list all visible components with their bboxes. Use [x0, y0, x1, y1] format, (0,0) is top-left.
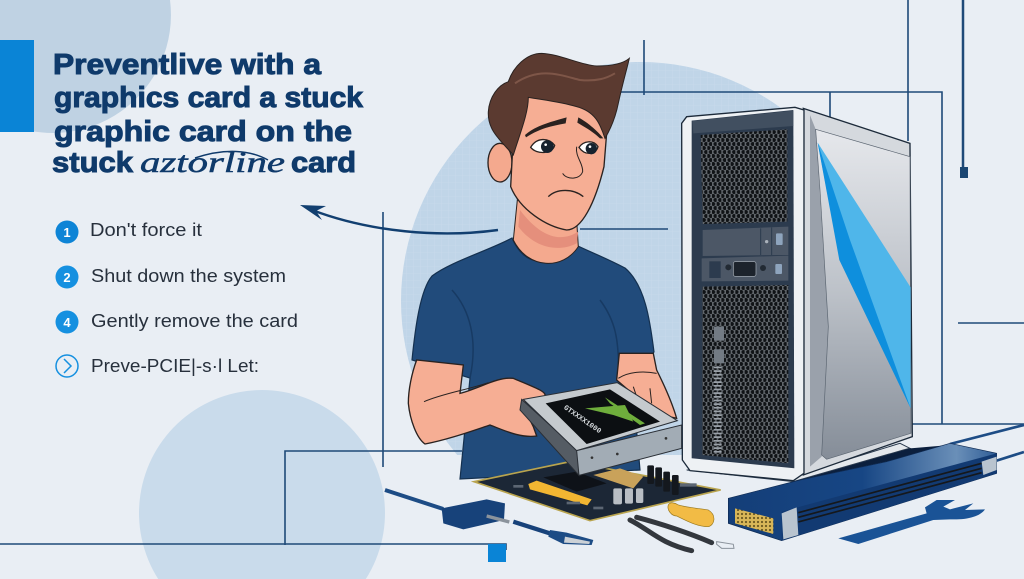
end caps — [782, 507, 798, 539]
tower side — [803, 108, 912, 475]
tower base — [687, 443, 910, 482]
step 1: 1 — [63, 225, 71, 240]
tower shadow — [800, 445, 950, 480]
dark blue stripe — [818, 143, 911, 408]
step 4 — [56, 310, 298, 334]
side panel — [816, 129, 911, 459]
card black face — [546, 389, 660, 444]
adapter box — [442, 499, 505, 529]
power cable — [385, 490, 443, 509]
yellow slot — [528, 481, 592, 505]
board components — [513, 483, 697, 509]
black capacitors — [647, 465, 679, 495]
io panel — [702, 256, 788, 281]
card fins — [520, 399, 579, 475]
drive bay — [703, 227, 788, 256]
ear — [488, 143, 512, 182]
eyebrows — [525, 117, 567, 137]
steps list — [56, 220, 298, 377]
rear ports — [714, 327, 724, 363]
card logo — [585, 397, 645, 425]
accent square: bottom — [488, 544, 506, 562]
title: aztorline — [140, 146, 285, 179]
heatsink — [593, 468, 643, 488]
title — [52, 49, 364, 179]
capacitors — [613, 488, 643, 504]
tools and cables — [385, 490, 734, 551]
step: chevron item: Preve-PCIE|-s·l Let: — [91, 356, 259, 376]
bar body — [728, 443, 997, 541]
face — [511, 93, 613, 230]
hair — [488, 53, 629, 155]
pc tower — [682, 107, 912, 482]
light blue stripe — [818, 143, 911, 408]
step 4: Gently remove the card — [91, 311, 298, 331]
step 2: 2 — [63, 270, 71, 285]
title: card — [291, 147, 356, 179]
gold connector — [735, 508, 773, 534]
screwdriver — [668, 503, 714, 527]
bar cables — [950, 425, 1024, 461]
upper mesh — [701, 129, 787, 224]
title: stuck — [52, 147, 134, 179]
mouth — [548, 190, 583, 197]
t-shirt — [412, 238, 654, 479]
lower mesh — [702, 285, 788, 463]
title: graphic card on the — [54, 116, 352, 148]
accent square: top right line end — [960, 167, 968, 178]
title: Preventlive with a — [53, 49, 322, 81]
side strip — [810, 115, 828, 467]
step 2 — [56, 266, 286, 288]
step 1: Don't force it — [90, 220, 202, 240]
step 4: 4 — [63, 315, 71, 330]
background circle: bottom left — [139, 390, 385, 579]
motherboard — [474, 462, 721, 521]
neck — [513, 200, 578, 263]
usb cable — [513, 522, 552, 534]
bar slots — [798, 463, 982, 522]
arrow — [300, 205, 498, 233]
wrench — [838, 500, 985, 544]
background circle: grid behind person — [401, 62, 780, 455]
title: graphics card a stuck — [54, 82, 364, 114]
pliers — [630, 517, 712, 551]
head — [488, 53, 629, 263]
nose — [563, 147, 583, 178]
card label: GTXXXX1000 — [562, 404, 602, 436]
step 1 — [56, 220, 202, 244]
card top — [523, 383, 677, 451]
clip — [717, 542, 734, 548]
background circle: top left — [0, 0, 171, 133]
eyes — [531, 140, 555, 152]
person — [408, 53, 677, 479]
step 2: Shut down the system — [91, 266, 286, 286]
tower front bezel — [682, 107, 804, 481]
power bar — [728, 425, 1024, 541]
graphics card — [520, 383, 682, 475]
card side bracket — [577, 425, 682, 475]
front dark panel — [692, 110, 794, 468]
left arm — [408, 360, 545, 444]
chip — [543, 472, 607, 492]
arms and hands — [408, 353, 677, 444]
accent block: top left — [0, 40, 34, 132]
shirt folds — [452, 290, 618, 380]
right arm — [617, 353, 677, 418]
